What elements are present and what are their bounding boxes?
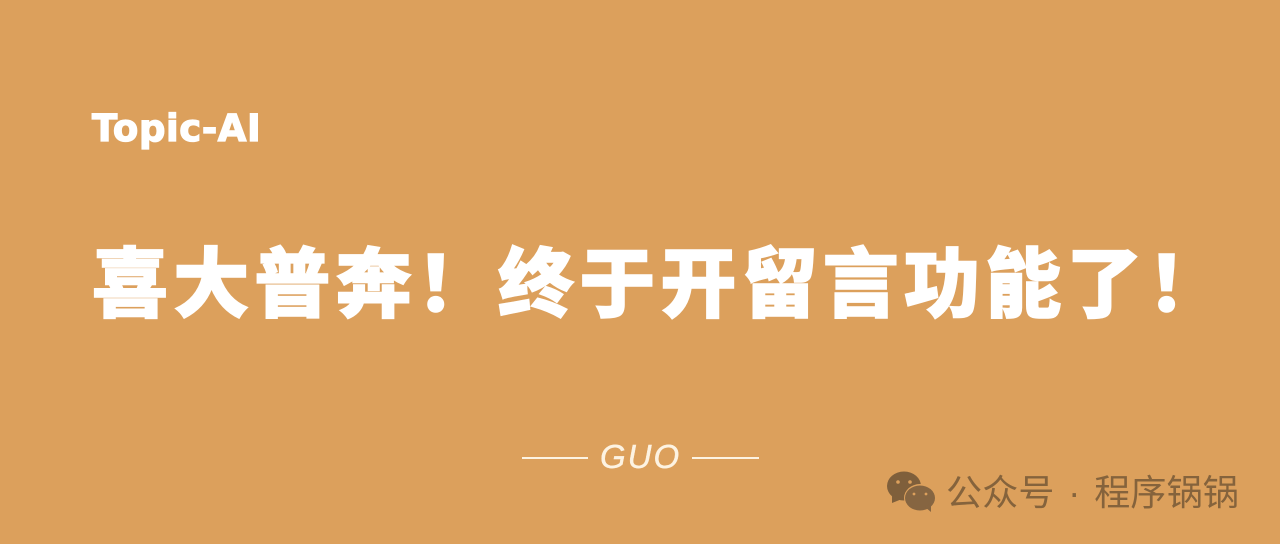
watermark text: 公众号 · 程序锅锅 <box>946 472 1239 513</box>
author line: GUO: GUO <box>600 438 681 475</box>
icon: wechat bubbles <box>887 472 935 512</box>
watermark: 公众号·程序锅锅 <box>887 472 1239 513</box>
tag: Topic-AI: Topic-AI <box>92 107 261 150</box>
title: 喜大普奔！终于开留言功能了！ <box>92 223 1229 333</box>
